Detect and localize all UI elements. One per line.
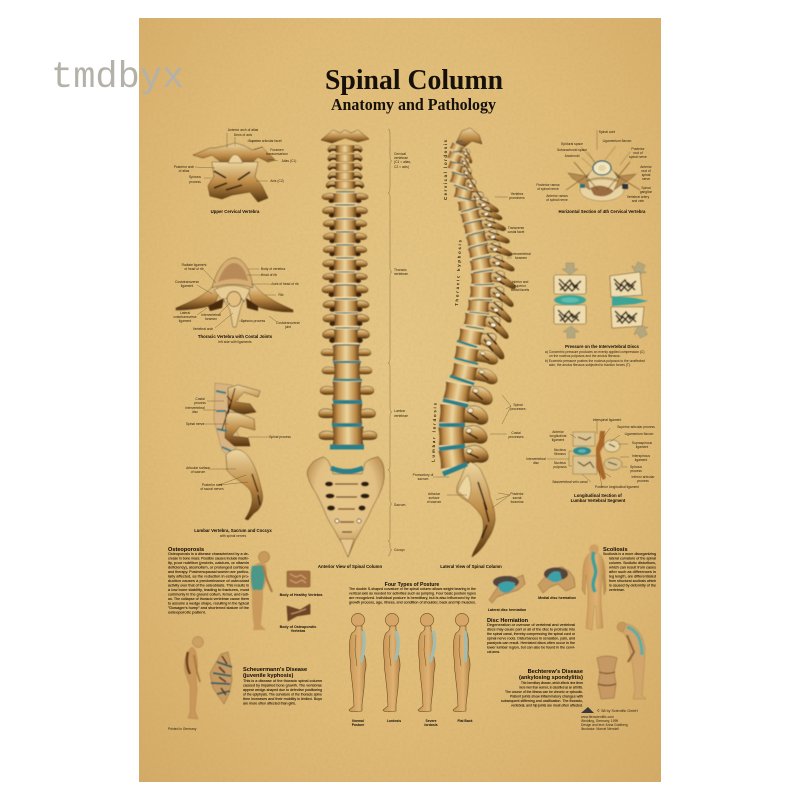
panel: lumbar vertebrae, sacrum and coccyx: [185, 383, 291, 538]
vertebra: healthy: [287, 571, 310, 587]
callouts: process: [630, 469, 642, 473]
lateral callouts: superior: [514, 284, 527, 288]
caption and explanation: a) Concentric pressure produces an evenly applied compression (C): [545, 350, 645, 354]
caption: [198, 334, 273, 344]
callouts: Epidural space: [561, 142, 583, 146]
callouts: Posterior arch: [174, 165, 194, 169]
region labels: Thoracic: [394, 268, 407, 272]
callouts: Posterior rami: [202, 483, 223, 487]
callouts: Posterior: [631, 147, 645, 151]
callouts: [185, 397, 291, 491]
callouts: Spinal nerve: [186, 422, 204, 426]
figure: swayback lordosis: [418, 613, 438, 727]
publisher credit: www.flexscientific.com: [581, 715, 614, 719]
callouts: disc: [533, 461, 539, 465]
text block: spinal nerve roots. Disturbances in sensation, pain, and: [487, 636, 575, 640]
caption: Lateral View of Spinal Column: [440, 564, 502, 569]
text block: [168, 551, 250, 614]
callouts: of sacral nerves: [200, 487, 224, 491]
callouts: ganglion: [640, 190, 652, 194]
panel: thoracic vertebra with costal joints: [173, 258, 300, 344]
text block: to assume a wedge shape, resulting in the typical: [168, 600, 249, 606]
text block: column. Scoliotic distortions,: [609, 560, 656, 565]
vertebra: osteoporotic: [287, 604, 310, 621]
lateral callouts: Spinal: [513, 403, 523, 407]
callouts: Head of rib: [261, 273, 277, 277]
callouts: Axis (C2): [270, 179, 284, 183]
callouts: Subarachnoid space: [557, 148, 587, 152]
text block: vertebrae.: [609, 587, 625, 592]
text block: [487, 622, 576, 654]
illustration: horizontal section: [566, 130, 640, 201]
callouts: [536, 130, 653, 203]
caption and explanation: on the nucleus pulposus and the anulus fibrosus.: [549, 354, 621, 358]
caption: Thoracic Vertebra with Costal Joints: [198, 334, 273, 339]
callouts: Supraspinous: [632, 441, 652, 445]
figure: normal posture: Posture: [352, 723, 364, 727]
illustration: longitudinal section: [573, 431, 622, 480]
callouts: Foramen: [270, 148, 284, 152]
text block: from structural scoliosis which: [609, 578, 656, 583]
callouts: Rib: [279, 293, 284, 297]
callouts: Costal: [195, 397, 205, 401]
callouts: Costotransverse: [175, 280, 199, 284]
lateral callouts: costal facet: [508, 230, 524, 234]
text block: commonly in the ground collum, femur, and radi-: [168, 592, 250, 596]
callouts: Spinal cord: [599, 130, 615, 134]
lateral callouts: Inferior and: [512, 280, 529, 284]
caption: Anterior View of Spinal Column: [318, 564, 382, 569]
callouts: [173, 263, 300, 331]
text block: [349, 586, 476, 604]
callouts: of spinal nerve: [537, 187, 559, 191]
text block: subsequent stiffening and ossification. The thoracic,: [501, 698, 583, 703]
text block: activity over that of the osteoblasts. This results in: [168, 582, 249, 588]
region labels: C2 = axis): [394, 165, 409, 169]
region labels: Cervical: [394, 152, 406, 156]
text block: osteoporotic patient.: [168, 610, 206, 614]
lateral callouts: Vertebra: [511, 192, 523, 196]
callouts: [174, 128, 296, 184]
caption and explanation: side, the anulus fibrosus subjected to traction forces (T).: [549, 363, 631, 367]
text block: lower lumbar region, but can also be found in the cervi-: [487, 644, 576, 650]
callouts: Basivertebral vein canal: [552, 480, 588, 484]
lateral callouts: Intervertebral: [511, 252, 531, 256]
region labels: Coccyx: [394, 548, 405, 552]
publisher credit: [581, 707, 638, 731]
callouts: Nucleus: [554, 461, 566, 465]
callouts: Interspinal ligament: [593, 418, 621, 422]
publisher credit: Design and text: Anna Goldberg: [581, 723, 628, 727]
callouts: root of: [641, 169, 651, 173]
region labels: vertebrae: [394, 414, 408, 418]
text block: is caused by deformity of the: [609, 582, 656, 588]
text block: cal area.: [487, 649, 500, 654]
text block: Scoliosis is a more disorganizing: [603, 551, 656, 556]
callouts: process: [637, 479, 649, 483]
text block: are more often affected than girls.: [243, 700, 296, 706]
region labels: Lumbar: [394, 409, 406, 413]
figure: normal posture: [349, 613, 366, 727]
text block: more men than women, is classified as an arthritis.: [519, 684, 583, 690]
callouts: root of: [633, 151, 643, 155]
text block: ity, poor nutrition (protein, calcium, or vitamin: [168, 560, 249, 565]
callouts: of atlas: [179, 169, 190, 173]
panel: pressure on the intervertebral discs: [545, 260, 651, 367]
text block: the spinal canal, thereby compressing the spinal cord or: [487, 631, 576, 636]
caption and explanation: [545, 344, 645, 367]
lateral callouts: costal facets: [511, 288, 530, 292]
caption: Lumbar Vertebral Segment: [571, 498, 626, 503]
callouts: Intervertebral: [185, 406, 205, 410]
figure: kyphotic person: [184, 636, 204, 719]
text block: [501, 680, 583, 708]
label: lateral: Lateral disc herniation: [488, 608, 526, 612]
text block: of the epiphysis. The curvature of the thoracic spine: [243, 692, 322, 696]
callouts: transversarium: [266, 152, 288, 156]
heading: [519, 669, 583, 681]
text block: Patient joints show inflammatory changes with: [510, 694, 583, 698]
text block: discs may cause part or all of the disc to protrude into: [487, 626, 575, 632]
callouts: foramen: [205, 317, 217, 321]
lateral callouts: prominens: [509, 196, 525, 200]
heading: (juvenile kyphosis): [243, 673, 293, 679]
caption: left side with ligaments: [218, 340, 252, 344]
callouts: Inferior articular: [632, 475, 655, 479]
lateral callouts: foramen: [515, 256, 527, 260]
callouts: spinal nerve: [629, 155, 647, 159]
panel: Scheuermann's disease: [168, 636, 322, 731]
text block: lateral curvature of the spinal: [609, 556, 656, 560]
figure: flat back: Flat Back: [457, 719, 473, 723]
callouts: pulposus: [553, 465, 567, 469]
figure: normal posture: Normal: [352, 719, 364, 723]
panel: Bechterew's disease: [501, 622, 646, 708]
text block: Degeneration or overuse of vertebral and vertebral: [487, 622, 575, 627]
caption: [571, 493, 626, 503]
text block: us. The collapse of thoracic vertebrae cause them: [168, 596, 249, 601]
rotated label: thoracic kyphosis: Thoracic kyphosis: [454, 239, 462, 306]
callouts: nerve: [642, 177, 650, 181]
callouts: Ligamentum flavum: [603, 139, 632, 143]
heading: Disc Herniation: [487, 618, 529, 624]
callouts: Dens of axis: [234, 133, 252, 137]
illustration: wedge vertebrae: [210, 652, 232, 704]
callouts: Atlas (C1): [282, 159, 296, 163]
panel: osteoporosis: [168, 547, 323, 633]
callouts: of spinal nerve: [546, 198, 568, 202]
publisher credit: Wedding, Germany, 1999: [581, 719, 618, 723]
text block: deficiency), alcoholism, or prolonged cortisone: [168, 564, 249, 570]
heading: Four Types of Posture: [385, 582, 439, 588]
subtitle: Anatomy and Pathology: [331, 95, 497, 114]
text block: leg length, are differentiated: [609, 574, 656, 578]
region labels: vertebrae: [394, 272, 408, 276]
watermark: tmdbyx: [51, 57, 184, 99]
callouts: ligament: [636, 445, 648, 449]
text block: caused by impaired bone growth. The vertebrae: [243, 682, 322, 688]
lateral callouts: processes: [508, 435, 524, 439]
callouts: of head of rib: [184, 267, 204, 271]
callouts: ligament: [181, 284, 193, 288]
callouts: Spinal: [641, 186, 651, 190]
illustration: thoracic vertebra: [176, 258, 293, 327]
callouts: disc: [192, 410, 198, 414]
figure: flat back: [453, 613, 473, 723]
callouts: Superior articular facet: [248, 139, 282, 143]
caption: Longitudinal Section of: [574, 493, 622, 498]
lateral callouts: Transverse: [508, 226, 524, 230]
label: healthy vertebra: Body of Healthy Vertebra: [280, 593, 323, 597]
callouts: Intervertebral: [526, 457, 546, 461]
callouts: Ligamentum flavum: [625, 432, 654, 436]
callouts: Interspinous: [632, 454, 650, 458]
callouts: Anterior: [640, 165, 653, 169]
label: osteoporotic vertebra: Body of Osteoporotic: [280, 625, 316, 629]
callouts: and vein: [632, 199, 644, 203]
heading: Bechterew's Disease: [528, 669, 583, 675]
figure: stooped person: [251, 552, 272, 630]
panel: disc herniation: [487, 567, 576, 654]
callouts: Radiate ligament: [182, 263, 206, 267]
lateral callouts: Articular: [428, 492, 441, 496]
lateral callouts: Costal: [511, 431, 521, 435]
text block: This hereditary disease, which affects nine times: [521, 680, 583, 685]
bracket: vertebral regions: [388, 129, 392, 556]
text block: appear wedge-shaped due to defective positioning: [243, 687, 322, 692]
callouts: process: [189, 180, 201, 184]
illustration: lumbar and sacrum: [214, 383, 263, 520]
text block: Osteoporosis is a disease characterized by a de-: [168, 551, 250, 556]
title: Spinal Column: [325, 64, 503, 96]
heading: [243, 667, 307, 679]
callouts: Arachnoid: [565, 154, 580, 158]
callouts: Spinous: [630, 465, 642, 469]
publisher credit: Illustrator: Marcel Mendell: [581, 727, 619, 731]
lateral callouts: sacrum: [418, 477, 429, 481]
illustration: lateral spine: [438, 128, 516, 557]
panel: scoliosis: [582, 544, 656, 630]
figure: lordosis: [383, 613, 401, 723]
text block: "Dowager's hump" and shortened stature of the: [168, 605, 249, 610]
callouts: Anterior: [552, 430, 565, 434]
text block: The double S-shaped curvature of the spinal column allows weight bearing in the: [349, 586, 476, 591]
heading: Scoliosis: [603, 547, 628, 553]
panel: longitudinal section of lumbar vertebral segment: [526, 418, 655, 503]
caption: Lumbar Vertebra, Sacrum and Coccyx: [194, 528, 272, 533]
panel: horizontal section of 4th cervical vertebra: [536, 130, 653, 214]
illustration: atlas and axis: [193, 143, 275, 202]
callouts: ligament: [179, 319, 191, 323]
caption: with spinal nerves: [220, 534, 246, 538]
callouts: fibrosus: [554, 452, 566, 456]
figure: swayback lordosis: Severe: [425, 719, 437, 723]
illustration: anterior spine: [307, 130, 384, 557]
text block: The course of the illness can be chronic or episodic.: [505, 689, 583, 694]
panel: four types of posture: [349, 582, 476, 727]
callouts: Costotransverse: [276, 321, 300, 325]
caption and explanation: b) Eccentric pressure pushes the nucleus pulposus to the unaffected: [545, 359, 645, 363]
rotated label: cervical lordosis: Cervical lordosis: [443, 139, 448, 200]
panel: lateral view of spinal column: [413, 128, 531, 569]
callouts: Joint of head of rib: [271, 282, 299, 286]
text block: crease in bone mass. Possible causes include inactiv-: [168, 556, 250, 560]
text block: paralysis can result. Herniated discs often occur in the: [487, 640, 575, 645]
poster background: [139, 18, 661, 782]
callouts: Spinal process: [269, 435, 291, 439]
caption: Horizontal Section of 4th Cervical Vertebra: [559, 209, 646, 214]
callouts: joint: [284, 325, 291, 329]
rotated label: lumbar lordosis: Lumbar lordosis: [431, 402, 438, 462]
callouts: Vertebral artery: [627, 195, 650, 199]
lateral callouts: of sacrum: [427, 500, 441, 504]
text block: duction causes a predominance of osteoclast: [168, 578, 250, 583]
label: osteoporotic vertebra: [280, 625, 316, 633]
callouts: Vertebral arch: [193, 327, 213, 331]
callouts: Nucleus: [554, 448, 566, 452]
panel: anterior view of spinal column: [307, 129, 411, 569]
heading: Scheuermann's Disease: [243, 667, 307, 673]
text block: [243, 678, 322, 706]
illustration: medial disc herniation: [538, 567, 575, 593]
callouts: costotransverse: [173, 315, 197, 319]
figure: swayback lordosis: lordosis: [424, 723, 438, 727]
caption: [194, 528, 272, 538]
lateral callouts: processes: [510, 407, 526, 411]
callouts: longitudinal: [550, 434, 567, 438]
text block: vertical axis as needed for activities such as jumping. Four basic posture types: [349, 590, 476, 596]
figure: stooped person: [617, 622, 646, 699]
text block: are recognized. Individual posture is hereditary, but is also influenced by the: [349, 595, 476, 600]
text block: growth process, age, illness, and condition of shoulder, back and hip muscles.: [349, 600, 476, 604]
callouts: Posterior longitudinal ligament: [595, 485, 639, 489]
callouts: Intervertebral: [201, 313, 221, 317]
lateral callouts: sacral: [513, 496, 522, 500]
text block: then increases and their mobility is limited. Boys: [243, 696, 322, 701]
callouts: Spinous: [189, 175, 201, 179]
caption and explanation: Pressure on the Intervertebral Discs: [565, 344, 640, 349]
callouts: ligament: [552, 438, 564, 442]
caption: Upper Cervical Vertebra: [211, 209, 260, 214]
callouts: [526, 418, 655, 489]
diagram a: concentric pressure: [554, 263, 586, 338]
heading: Osteoporosis: [168, 547, 204, 553]
region labels: (C1 = atlas,: [394, 160, 411, 164]
text block: and therapy. Postmenopausal women are particu-: [168, 569, 250, 574]
diagram b: eccentric pressure: [610, 260, 651, 340]
label: medial: Medial disc herniation: [538, 596, 576, 600]
region labels: [394, 152, 411, 552]
lateral callouts: foramina: [511, 500, 524, 504]
illustration: lateral disc herniation: [489, 575, 525, 603]
label: osteoporotic vertebra: Vertebra: [291, 629, 306, 633]
text block: vertebral, and hip joints are most often affected.: [511, 702, 583, 708]
callouts: Articular surface: [186, 466, 210, 470]
lateral callouts: Promontory of: [413, 473, 433, 477]
callouts: ligament: [635, 458, 647, 462]
region labels: Sacrum: [394, 503, 406, 507]
text block: after such as differences in: [609, 569, 656, 574]
figure: person from behind: [582, 544, 606, 630]
callouts: Body of vertebra: [261, 267, 285, 271]
callouts: Spinous process: [241, 319, 266, 323]
callouts: Anterior arch of atlas: [228, 128, 259, 132]
callouts: of sacrum: [191, 470, 205, 474]
figure: lordosis: Lordosis: [387, 719, 401, 723]
heading: (ankylosing spondylitis): [519, 675, 583, 681]
text block: larly affected, as the reduction in estrogen pro-: [168, 574, 250, 578]
callouts: Superior articular process: [617, 425, 655, 429]
callouts: Anterior ramus: [546, 194, 568, 198]
callouts: Lateral: [180, 311, 190, 315]
lateral callouts: [413, 192, 531, 508]
illustration: bamboo spine: [597, 656, 617, 699]
credit: Printed in Germany: [168, 727, 197, 731]
region labels: vertebrae: [394, 156, 408, 160]
callouts: process: [194, 401, 206, 405]
text block: which can result from cases: [609, 564, 656, 570]
lateral callouts: surface: [429, 496, 440, 500]
callouts: spinal: [642, 173, 651, 177]
text block: [603, 551, 656, 592]
publisher credit: © '88 by Scientific GmbH: [597, 709, 638, 713]
text block: This is a disease of the thoracic spinal column: [243, 678, 322, 683]
callouts: Posterior ramus: [536, 183, 560, 187]
panel: upper cervical vertebrae: [174, 128, 296, 214]
lateral callouts: Posterior: [510, 492, 524, 496]
text block: a low bone stability, leading to fractures, most: [168, 587, 250, 592]
